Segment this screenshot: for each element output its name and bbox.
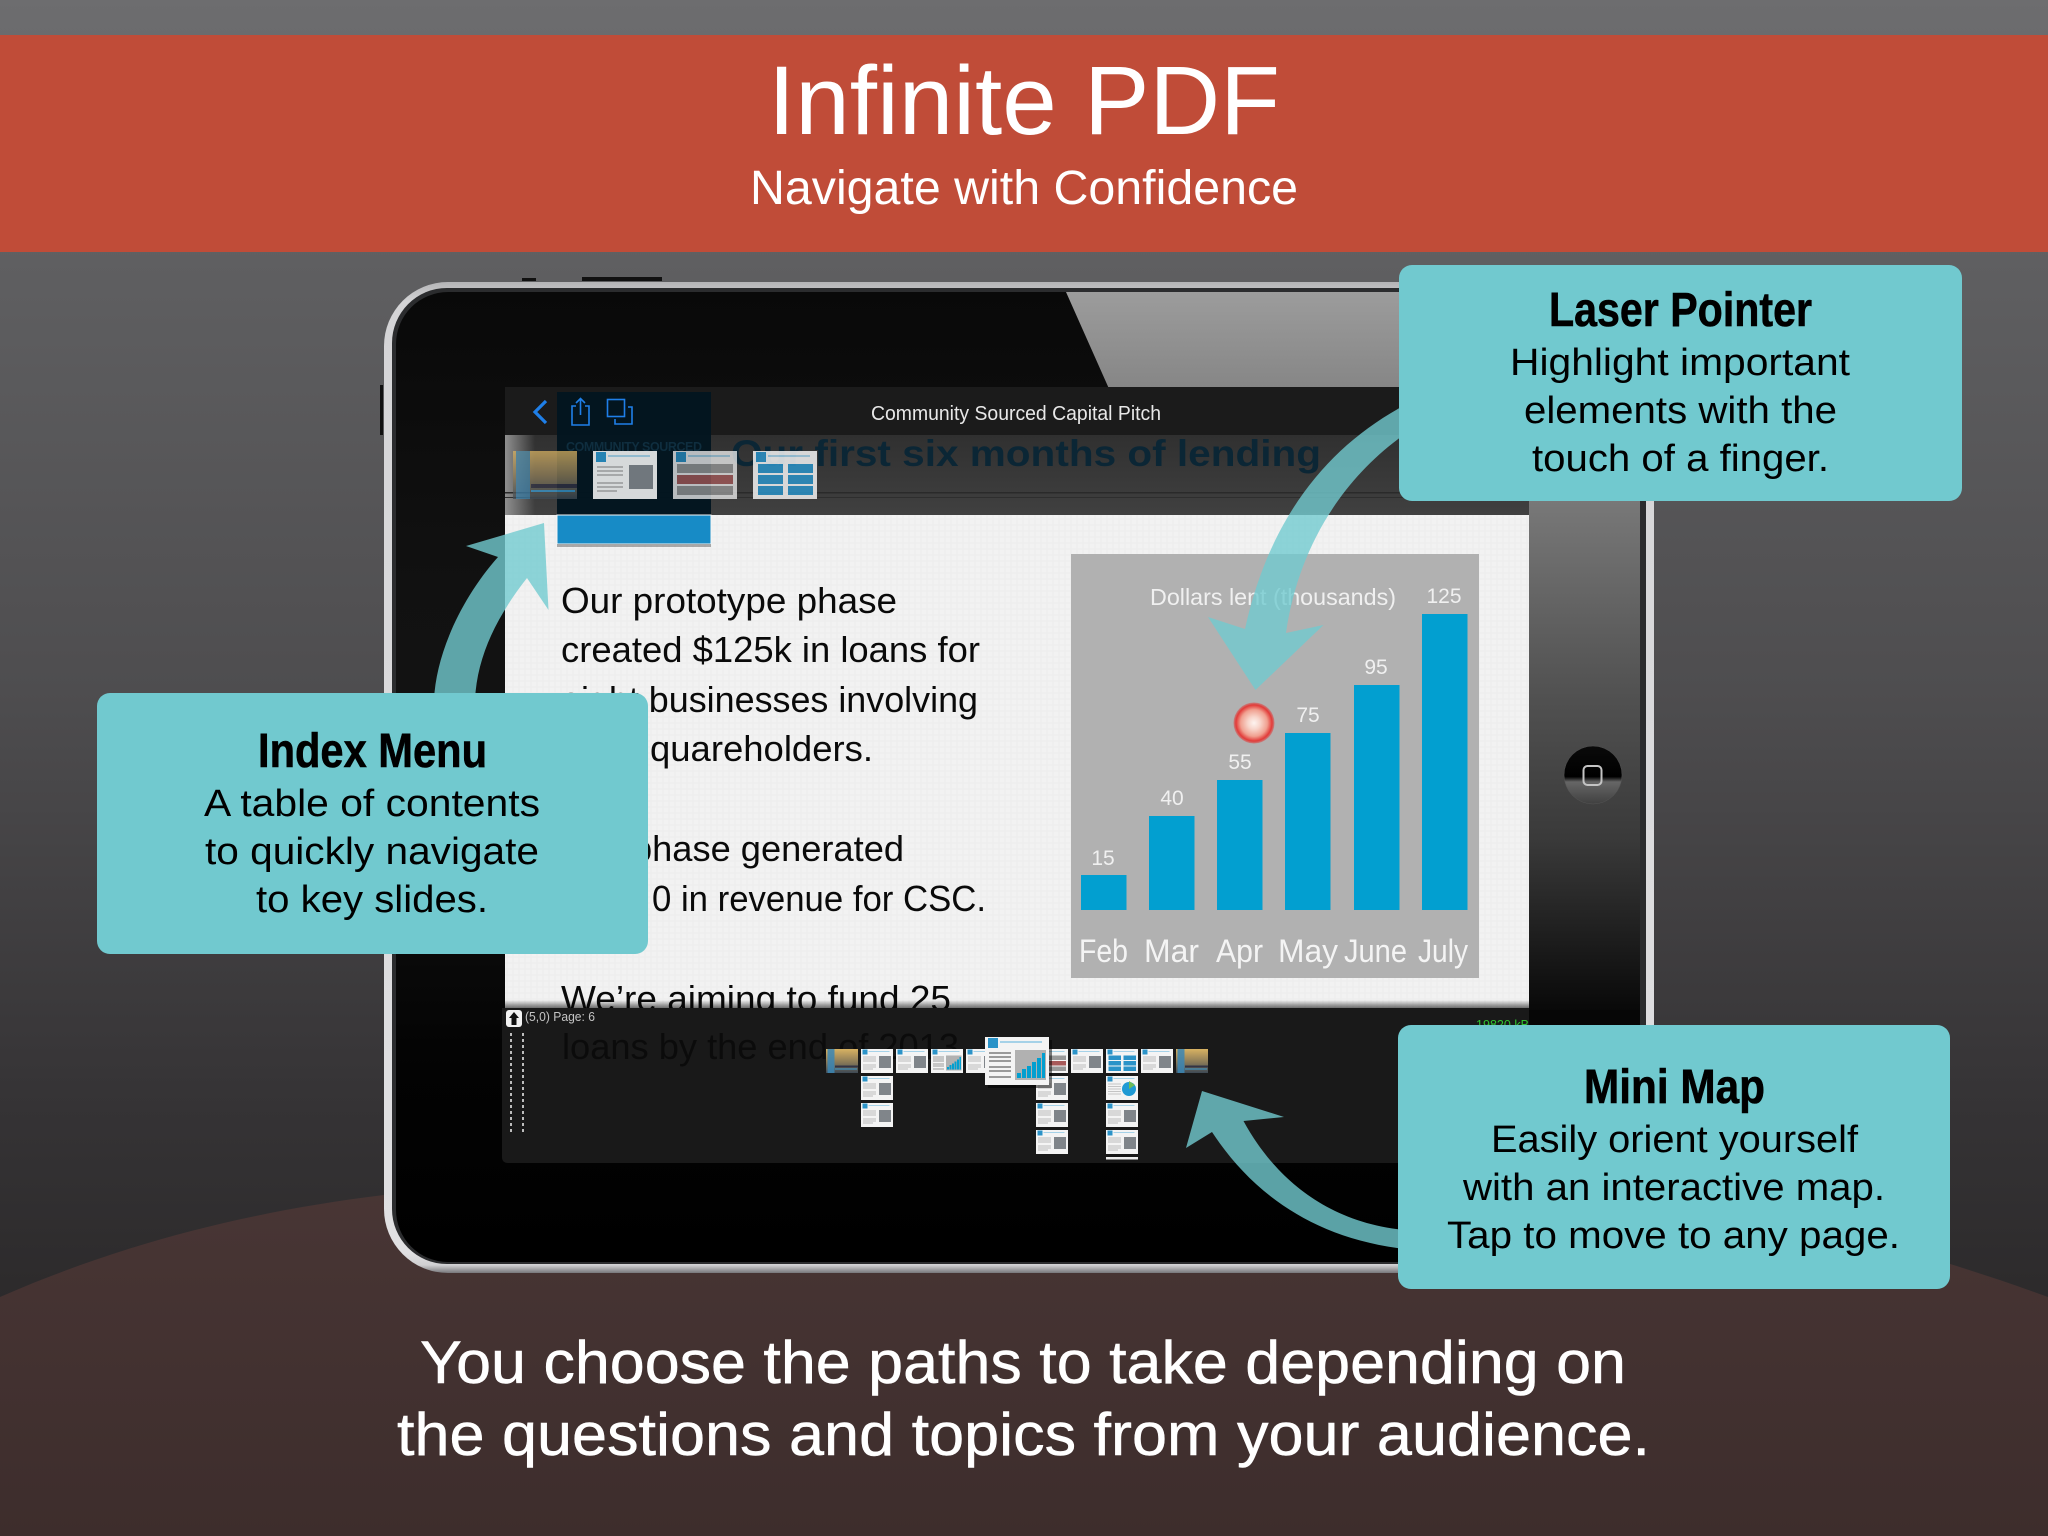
callout text: to quickly navigate — [205, 831, 539, 873]
callout: index menu — [97, 693, 648, 954]
arrow: laser pointer — [1208, 405, 1405, 690]
toolbar — [505, 387, 1529, 435]
bezel glare — [1066, 292, 1640, 1010]
dotted guides — [511, 1033, 523, 1132]
month labels: Apr — [1216, 933, 1263, 969]
logo box on slide: COMMUNITY SOURCED — [566, 440, 702, 454]
toolbar title: Community Sourced Capital Pitch — [871, 403, 1161, 425]
slide body text — [561, 580, 986, 1019]
bar values: 15 — [1091, 847, 1115, 870]
bars — [1081, 614, 1468, 910]
bar values: 40 — [1160, 787, 1184, 810]
header banner — [0, 35, 2048, 252]
bar values — [1091, 585, 1462, 870]
thumbnail index strip — [505, 433, 1529, 515]
callout text: to key slides. — [256, 879, 488, 921]
slide heading behind strip: Our first six months of lending — [731, 433, 1321, 474]
month labels: July — [1418, 933, 1468, 969]
callout text: Highlight important — [1510, 342, 1850, 384]
callout text: touch of a finger. — [1532, 438, 1829, 480]
bar chart: dollars lent — [1071, 554, 1479, 978]
callout text: Tap to move to any page. — [1447, 1215, 1900, 1257]
slide body text: created $125k in loans for — [561, 629, 980, 670]
logo box on slide — [557, 392, 711, 547]
bottom caption: You choose the paths to take depending on — [420, 1329, 1626, 1396]
callout: mini map — [1398, 1025, 1950, 1289]
title: Infinite PDF — [768, 46, 1280, 155]
month labels: May — [1278, 933, 1338, 969]
bottom caption — [397, 1329, 1650, 1468]
slide body text: quareholders. — [650, 728, 873, 769]
subtitle: Navigate with Confidence — [750, 162, 1298, 215]
slide body text: We’re aiming to fund 25 — [561, 978, 951, 1019]
current page thumbnail — [985, 1037, 1052, 1088]
tablet metal rim — [384, 282, 1654, 1273]
arrow: mini map — [1186, 1091, 1405, 1249]
callout text: Easily orient yourself — [1491, 1119, 1858, 1161]
bar values: 125 — [1426, 585, 1462, 608]
background hill — [0, 1139, 2048, 1536]
memory usage label: 19820 kB — [1476, 1017, 1529, 1032]
chart title: Dollars lent (thousands) — [1150, 584, 1396, 610]
arrow: index menu — [434, 523, 548, 700]
slide body text: phase generated — [632, 828, 904, 869]
bar values: 55 — [1228, 751, 1252, 774]
callout text — [1447, 1119, 1900, 1257]
side and top hardware buttons — [380, 277, 662, 435]
month labels: Mar — [1144, 933, 1199, 969]
icon: duplicate — [608, 400, 632, 424]
callout text — [204, 783, 540, 921]
icon: share — [572, 398, 589, 425]
icon: mini map up arrow — [506, 1010, 522, 1027]
mini map thumbnails — [826, 1037, 1208, 1160]
slide body text: Our prototype phase — [561, 580, 897, 621]
page position label: (5,0) Page: 6 — [525, 1010, 595, 1024]
callout text: elements with the — [1524, 390, 1837, 432]
slide body text: eight businesses involving — [561, 679, 978, 720]
callout text: with an interactive map. — [1462, 1167, 1885, 1209]
month labels: June — [1344, 933, 1407, 969]
callout text: A table of contents — [204, 783, 540, 825]
laser pointer dot — [1234, 702, 1274, 744]
mini map panel — [502, 1008, 1529, 1163]
callout heading: Index Menu — [258, 725, 487, 778]
tablet device — [380, 277, 1654, 1273]
month labels — [1079, 933, 1468, 969]
index thumbnails — [513, 451, 817, 499]
slide area — [505, 515, 1529, 1019]
callout heading: Mini Map — [1584, 1061, 1765, 1114]
slide body text: 0 in revenue for CSC. — [652, 878, 986, 919]
month labels: Feb — [1079, 933, 1128, 969]
callout heading: Laser Pointer — [1549, 284, 1812, 337]
bar values: 75 — [1296, 704, 1320, 727]
home button — [1564, 746, 1622, 804]
icon: back chevron — [535, 401, 546, 423]
callout text — [1510, 342, 1850, 480]
callout: laser pointer — [1399, 265, 1962, 501]
bottom caption: the questions and topics from your audience. — [397, 1401, 1650, 1468]
slide text through mini map: loans by the end of 2013 — [562, 1026, 959, 1067]
tablet bezel — [392, 288, 1646, 1264]
bar values: 95 — [1364, 656, 1388, 679]
